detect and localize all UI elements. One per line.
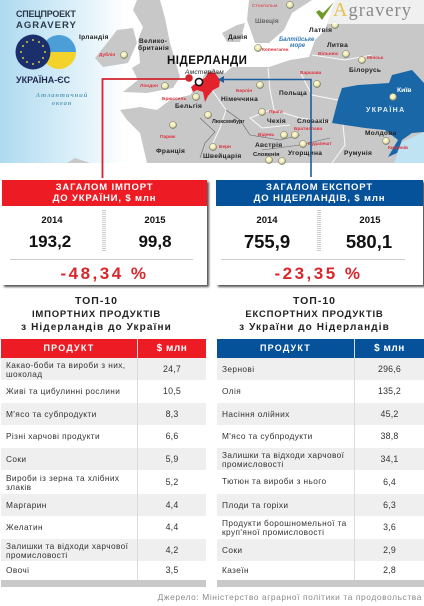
heading: top-10 imports: з Нідерландів до України [21,322,172,333]
row [6,473,178,492]
Ukraine [332,70,424,157]
heading: top-10 imports: ІМПОРТНИХ ПРОДУКТІВ [32,309,161,320]
icon: EU and Ukraine circles [16,34,76,70]
special project title: СПЕЦПРОЕКТ [16,9,76,19]
row: 3,6 [383,522,396,532]
row [222,476,396,487]
row [6,522,178,532]
panel: total import [2,180,207,285]
map labels: Франція [156,147,185,155]
table header [1,339,206,358]
row: 8,3 [166,409,178,419]
map labels: Балтійське [279,36,315,43]
row: М'ясо та субпродукти [222,431,313,441]
row: Соки [222,545,242,555]
map labels: Молдова [365,130,397,137]
map labels: Копенгаген [262,47,289,53]
row: М'ясо та субпродукти [6,409,97,419]
special project title: AGRAVERY [16,20,77,30]
row: Вироби із зерна та хлібних [6,473,119,483]
year 2014: 2014 [41,215,63,226]
import connector line [102,74,193,178]
map labels: Братислава [294,126,323,132]
map labels: УКРАЇНА [366,106,406,114]
map labels: Білорусь [349,66,381,74]
row [217,494,424,516]
map labels: Велико- [139,38,167,45]
row [6,431,178,441]
row: 2,8 [383,565,396,575]
map labels: Австрія [255,141,282,149]
table: exports [217,339,424,587]
map labels: Польща [279,90,307,97]
export header: ДО НІДЕРЛАНДІВ, $ млн [254,193,385,204]
row: 4,2 [166,545,178,555]
map labels: Швейцарія [203,152,242,160]
map labels: Стокгольм [252,3,278,9]
year 2015: 2015 [144,215,166,226]
row: промисловості [6,550,68,560]
row: 5,9 [166,454,178,464]
row [1,403,206,425]
row [6,565,178,575]
map labels: Угорщина [288,150,322,157]
row: Залишки та відходи харчової [222,450,344,460]
map labels: Данія [228,33,248,41]
export header [216,180,423,206]
logo: Agravery [312,0,424,24]
value 580,1: 580,1 [346,231,392,252]
year 2014: 2014 [256,215,278,226]
map of Europe [0,0,424,178]
column divider [137,339,138,580]
table header: $ млн [157,343,187,354]
row: 34,1 [381,454,398,464]
row: Зернові [222,364,254,374]
import header [2,180,207,206]
row: Казеїн [222,565,249,575]
map labels: Бельгія [175,102,202,110]
row [217,358,424,380]
row: Тютюн та вироби з нього [222,476,327,486]
row [1,494,206,516]
source note: Джерело: Міністерство аграрної політики та продовольства [158,592,422,602]
row [1,358,206,380]
map labels: Мінськ [367,55,384,61]
Atlantic ocean label [36,92,88,107]
table: imports [1,339,206,587]
row [1,539,206,561]
map labels: Київ [397,87,411,94]
value 755,9: 755,9 [244,231,290,252]
row: Живі та цибулинні рослини [6,386,120,396]
row: 5,2 [166,477,178,487]
map labels: Відень [258,132,274,138]
table header [217,339,424,358]
table header: $ млн [374,343,405,354]
map labels: Берлін [236,88,252,94]
row: 6,3 [383,500,396,510]
row: злаків [6,482,31,492]
map labels: Амстердам [184,68,224,76]
import header: ДО УКРАЇНИ, $ млн [53,193,156,204]
table footer [1,580,206,587]
row [6,386,181,396]
row: Соки [6,454,26,464]
row [217,448,424,470]
row: 4,4 [166,522,178,532]
map labels: Румунія [344,149,372,157]
export connector arrow [218,76,311,177]
heading: top-10 exports: ТОП-10 [293,295,336,307]
row: 3,5 [166,565,178,575]
row: Желатин [6,522,43,532]
map labels: Дублін [99,51,115,58]
row: Продукти борошномельної та [222,518,347,528]
map labels: Прага [269,109,283,115]
heading: top-10 imports: ТОП-10 [75,295,118,307]
row: промисловості [222,459,284,469]
row: Какао-боби та вироби з них, [6,360,125,370]
map labels: Париж [160,134,176,140]
import header: ЗАГАЛОМ ІМПОРТ [56,182,153,193]
row: 10,5 [163,386,181,396]
row: 6,6 [166,431,178,441]
column divider [354,339,355,580]
row: 38,8 [381,431,398,441]
row: Плоди та горіхи [222,500,288,510]
map labels: Словакія [297,117,329,125]
export header: ЗАГАЛОМ ЕКСПОРТ [266,182,373,193]
icon: green check [316,2,334,20]
map labels: британія [138,44,169,52]
map labels: Литва [327,42,348,49]
dashed divider [317,210,321,251]
map labels: море [290,43,306,49]
Black Sea [394,132,424,163]
row: Залишки та відходи харчової [6,541,128,551]
Netherlands highlight [191,72,220,102]
map labels: Латвія [309,26,332,34]
map labels: Ірландія [79,33,109,41]
change percent: -23,35 % [274,264,363,283]
rule [221,259,405,260]
table header: ПРОДУКТ [44,343,94,353]
map labels: Швеція [255,17,279,25]
row: Овочі [6,565,29,575]
row [222,431,398,441]
row [222,518,396,537]
row [1,448,206,470]
rule [10,259,193,260]
map labels: Брюссель [162,96,186,102]
map labels: Лондон [140,83,158,89]
row: 24,7 [163,364,181,374]
map labels: Вільнюс [318,51,339,57]
row: 135,2 [378,386,401,396]
row: Олія [222,386,241,396]
dashed divider [102,210,106,251]
value 193,2: 193,2 [29,232,71,251]
year 2015: 2015 [359,215,381,226]
row [222,386,401,396]
map labels: Будапешт [308,141,332,147]
Ukraine-EU label: УКРАЇНА-ЄС [16,75,70,85]
row [217,403,424,425]
map pin [195,78,203,86]
heading: top-10 imports [21,295,172,333]
row: 2,9 [383,545,396,555]
map labels: Варшава [300,70,322,76]
map labels: НІДЕРЛАНДИ [167,55,247,67]
row: 4,4 [166,500,178,510]
change percent: -48,34 % [60,264,149,283]
row: Насіння олійних [222,409,290,419]
value 99,8: 99,8 [138,232,172,251]
heading: top-10 exports: з України до Нідерландів [239,322,390,333]
map labels: Чехія [267,117,286,125]
Atlantic ocean label: океан [52,100,72,107]
row: 6,4 [383,477,396,487]
city dots [120,1,397,165]
map labels: Німеччина [221,95,258,103]
map labels: Словенія [253,152,280,158]
table footer [217,580,424,587]
map labels: Люксембург [212,118,245,125]
row: 45,2 [381,409,398,419]
row [222,565,396,575]
map labels [79,3,411,160]
row: шоколад [6,369,43,379]
row: круп'яної промисловості [222,527,324,537]
heading: top-10 exports: ЕКСПОРТНИХ ПРОДУКТІВ [245,309,384,320]
heading: top-10 exports [239,295,390,333]
row: Різні харчові продукти [6,431,100,441]
row [217,539,424,561]
special project title [16,9,77,30]
row: Маргарин [6,500,47,510]
Atlantic ocean label: Атлантичний [36,92,88,99]
map labels: Кишинів [388,145,408,151]
map labels: Берн [219,144,231,150]
panel: total export [216,180,423,285]
table header: ПРОДУКТ [260,343,311,353]
row: 296,6 [378,364,401,374]
